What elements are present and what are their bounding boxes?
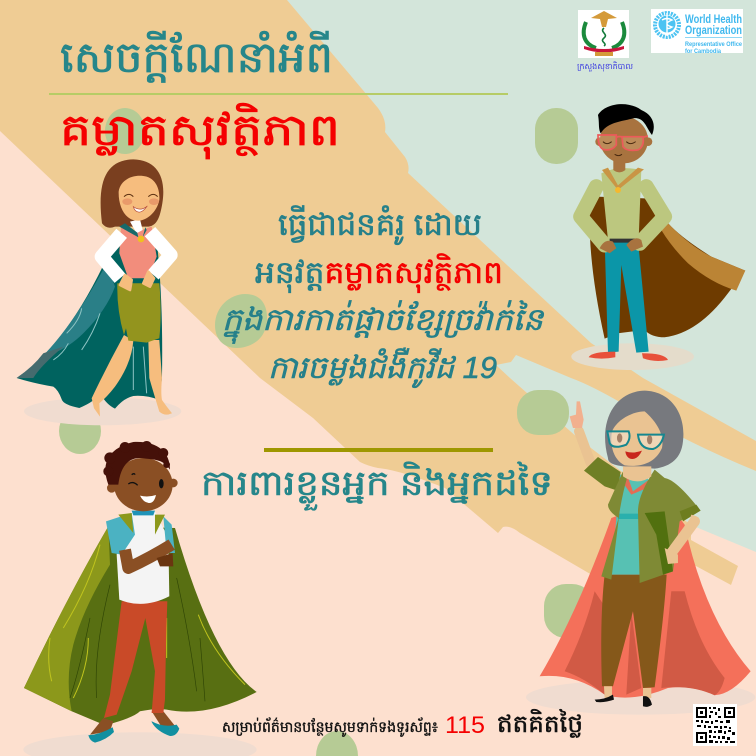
main message [222, 205, 545, 388]
footer hotline: 115 [445, 712, 485, 739]
logo: ministry of health: ក្រសួងសុខាភិបាល [577, 61, 633, 72]
logo: WHO: for Cambodia [685, 49, 722, 55]
decorative green blobs [59, 108, 594, 756]
footer hotline [222, 709, 583, 739]
main message: ក្នុងការកាត់ផ្តាច់ខ្សែច្រវ៉ាក់នៃ [222, 300, 545, 344]
title divider [49, 93, 508, 95]
logo: WHO: Representative Office [685, 42, 743, 48]
character: older woman with coral cape [526, 391, 755, 715]
protect heading: ការពារខ្លួនអ្នក និងអ្នកដទៃ [201, 461, 553, 511]
olive divider [264, 448, 493, 452]
main message: អនុវត្តគម្លាតសុវត្ថិភាព [255, 253, 503, 293]
QR code [693, 704, 737, 746]
logo: ministry of health [577, 10, 633, 72]
logo: WHO [651, 9, 743, 55]
title: សេចក្តីណែនាំអំពី [60, 31, 333, 83]
footer hotline: សម្រាប់ព័ត៌មានបន្ថែមសូមទាក់ទងទូរស័ព្ទ៖ [222, 717, 438, 737]
character: boy with green cape [23, 441, 257, 756]
main message: ធ្វើជាជនគំរូ ដោយ [278, 205, 482, 245]
main message: ការចម្លងជំងឺកូវីដ 19 [268, 347, 497, 388]
character: woman with teal cape [17, 159, 181, 425]
red heading: គម្លាតសុវត្ថិភាព [60, 103, 340, 159]
footer hotline: ឥតគិតថ្លៃ [497, 709, 583, 738]
character: man with brown cape [571, 104, 745, 370]
